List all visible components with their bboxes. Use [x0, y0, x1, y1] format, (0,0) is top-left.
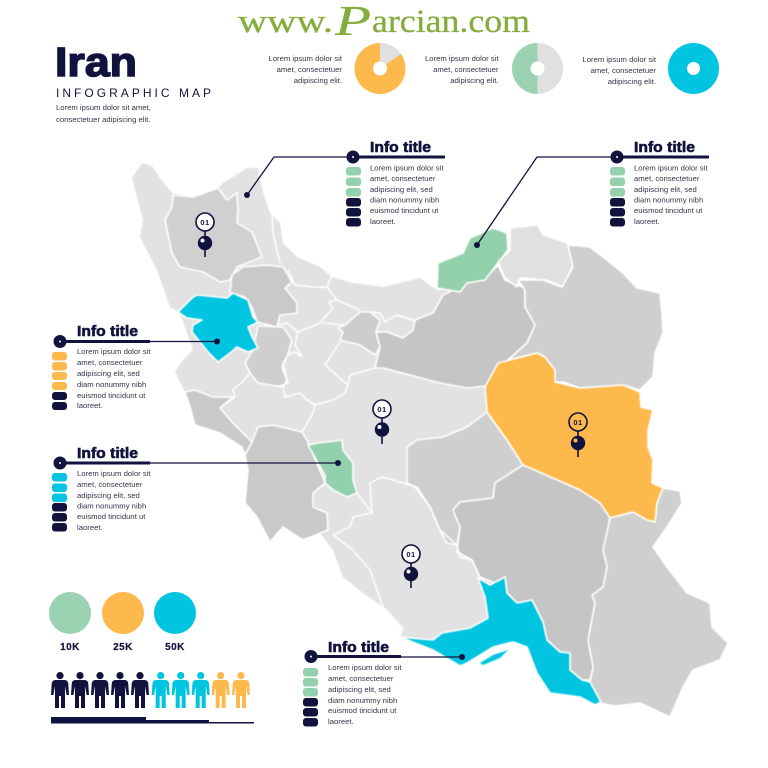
callout: Kurdistan info: euismod tincidunt ut [77, 391, 146, 400]
callout: Kurdistan info: diam nonummy nibh [77, 380, 146, 389]
callout: Kurdistan info: Info title [77, 324, 138, 340]
region: base silhouette [132, 163, 640, 690]
title: Lorem ipsum dolor sit amet, [56, 103, 151, 112]
region: Yazd [407, 412, 523, 545]
title: consectetuer adipiscing elit. [56, 115, 150, 124]
panel: blue donut: adipiscing elit. [608, 77, 656, 86]
region: Kerman [453, 465, 610, 680]
callout: north info: Lorem ipsum dolor sit [370, 164, 444, 172]
region: Khuzestan [245, 425, 328, 542]
region: Ilam [185, 390, 252, 455]
callout: Chaharmahal info: laoreet. [77, 523, 103, 532]
internal province borders [220, 213, 472, 628]
pictogram: people row [51, 672, 250, 708]
callout: Golestan info: diam nonummy nibh [634, 196, 703, 204]
panel: blue donut: amet, consectetuer [591, 66, 656, 75]
callout: north info [244, 140, 445, 226]
callout: Hormozgan info: Info title [328, 640, 389, 656]
callout: Hormozgan info: Lorem ipsum dolor sit [328, 663, 402, 672]
callout: Hormozgan info [303, 640, 465, 726]
panel: orange donut [268, 43, 406, 94]
callout: Chaharmahal info: Lorem ipsum dolor sit [77, 469, 151, 478]
map pin: Fars: 01 [406, 550, 416, 559]
panel: green donut: Lorem ipsum dolor sit [425, 54, 499, 63]
panel: green donut [425, 43, 563, 94]
callout: Kurdistan info: Lorem ipsum dolor sit [77, 347, 151, 356]
callout: north info: amet, consectetuer [370, 174, 436, 183]
panel: orange donut: Lorem ipsum dolor sit [268, 54, 343, 63]
region: East Azerbaijan [165, 188, 262, 282]
region: Alborz-Tehran [338, 312, 380, 355]
map pin: East Azerbaijan: 01 [200, 218, 210, 227]
region: Hamedan [245, 326, 292, 387]
region: Razavi Khorasan [508, 245, 663, 390]
panel: blue donut [582, 43, 719, 94]
callout: north info: adipiscing elit, sed [370, 185, 433, 194]
panel: blue donut: Lorem ipsum dolor sit [582, 55, 657, 64]
map pin: East Azerbaijan [196, 213, 214, 257]
callout: Chaharmahal info [52, 446, 341, 532]
watermark: arcian.com [372, 4, 530, 40]
map pin: Isfahan: 01 [377, 405, 387, 414]
callout: Hormozgan info: amet, consectetuer [328, 674, 394, 683]
legend: population circles: 10K [60, 642, 80, 653]
watermark: P [334, 0, 371, 45]
title [55, 39, 211, 124]
callout: Kurdistan info [52, 324, 220, 410]
callout: Chaharmahal info: diam nonummy nibh [77, 502, 146, 510]
watermark [238, 0, 530, 45]
panel: green donut: amet, consectetuer [433, 65, 499, 74]
callout: Hormozgan info: diam nonummy nibh [328, 696, 397, 705]
callout: Chaharmahal info: euismod tincidunt ut [77, 512, 146, 521]
region: North Khorasan [498, 225, 573, 287]
watermark: www. [238, 4, 333, 40]
callout: Chaharmahal info: adipiscing elit, sed [77, 491, 140, 500]
legend: population circles: 50K [165, 642, 185, 653]
callout: north info: laoreet. [370, 217, 396, 226]
callout: Golestan info: adipiscing elit, sed [634, 185, 697, 194]
callout: north info: diam nonummy nibh [370, 196, 439, 204]
callout: Kurdistan info: laoreet. [77, 401, 103, 410]
callout: Hormozgan info: adipiscing elit, sed [328, 685, 391, 694]
region: Zanjan [230, 265, 297, 327]
title: INFOGRAPHIC MAP [56, 86, 211, 100]
map of Iran [132, 163, 728, 717]
callout: Chaharmahal info: amet, consectetuer [77, 480, 143, 489]
region: Chaharmahal (green) [308, 440, 357, 497]
panel: orange donut: adipiscing elit. [294, 76, 342, 85]
map pin: Fars [402, 545, 420, 588]
callout: Golestan info: laoreet. [634, 217, 660, 226]
title: Iran [55, 39, 137, 85]
callout: Golestan info: Lorem ipsum dolor sit [634, 164, 708, 172]
region: Sistan [588, 488, 728, 717]
callout: Golestan info: amet, consectetuer [634, 174, 700, 183]
callout: north info: euismod tincidunt ut [370, 206, 439, 215]
callout: Hormozgan info: euismod tincidunt ut [328, 706, 397, 715]
panel: orange donut: amet, consectetuer [277, 65, 342, 74]
panel: green donut: adipiscing elit. [450, 76, 498, 85]
callout: Golestan info: Info title [634, 140, 695, 156]
region: Kurdistan (blue) [178, 293, 258, 362]
region: Semnan [375, 265, 535, 388]
legend: population circles: 25K [113, 642, 133, 653]
map pin: South Khorasan: 01 [573, 418, 583, 427]
region: Hormozgan (blue) [400, 577, 601, 705]
callout: Golestan info: euismod tincidunt ut [634, 206, 703, 215]
callout: Golestan info [474, 140, 709, 248]
legend: population circles [49, 592, 196, 653]
region: Golestan [437, 228, 508, 292]
map pin: Isfahan [373, 400, 391, 444]
callout: Hormozgan info: laoreet. [328, 717, 354, 726]
region: South Khorasan (orange) [485, 353, 663, 522]
map pin: South Khorasan [569, 413, 587, 457]
stepped progress bar [51, 717, 254, 724]
callout: north info: Info title [370, 140, 431, 156]
callout: Kurdistan info: adipiscing elit, sed [77, 369, 140, 378]
callout: Chaharmahal info: Info title [77, 446, 138, 462]
region: Qeshm island [480, 650, 508, 665]
callout: Kurdistan info: amet, consectetuer [77, 358, 143, 367]
